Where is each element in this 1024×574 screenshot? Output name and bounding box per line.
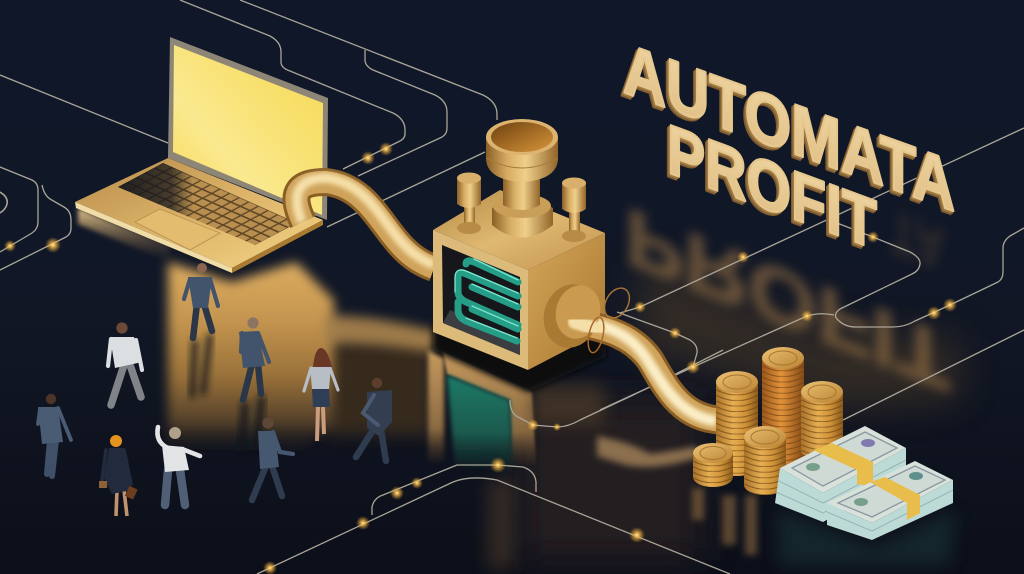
brown secondary glow: [325, 340, 433, 435]
person: white shirt: [108, 322, 142, 405]
pipe reflection band: [325, 316, 440, 352]
bundle top face: [827, 461, 953, 523]
pipe: laptop to machine: [296, 178, 434, 268]
machine funnel: [486, 119, 558, 238]
title line: PROFIT: PROFIT: [667, 110, 877, 265]
machine knob right: [562, 178, 586, 242]
cube reflection frame: [428, 350, 444, 462]
pipe coupling: [537, 278, 635, 354]
laptop base: [75, 158, 323, 268]
title line: PROFIT: PROFIT: [666, 112, 876, 267]
person: top centre: [184, 263, 218, 398]
person: right suit: [356, 378, 392, 461]
title line: AUTOMATA: AUTOMATA: [623, 27, 955, 227]
teal heat exchanger: [455, 259, 518, 341]
title: Automata Profit: [620, 27, 955, 268]
money reflection: [778, 510, 955, 565]
laptop edge glow: [78, 208, 170, 262]
coin stack: front centre: [744, 426, 786, 495]
bundle paper band: [870, 477, 920, 520]
title reflection haze: [640, 260, 960, 410]
machine knob left: [457, 172, 481, 234]
coin reflections: [692, 488, 757, 555]
person: orange haired woman: [99, 435, 138, 516]
coin stack: back right: [801, 381, 843, 460]
reflection under wires: [486, 480, 514, 570]
pipe reflection right: [597, 436, 697, 467]
floor reflections: [78, 208, 960, 570]
laptop screen display: [173, 45, 323, 215]
bundle sides: [827, 480, 953, 540]
machine shadow: [433, 325, 606, 392]
coin stack: tallest: [762, 347, 804, 467]
coin stack: small left: [693, 443, 733, 487]
machine cube: [433, 190, 605, 370]
title line: AUTOMATA: AUTOMATA: [622, 29, 953, 229]
laptop trackpad: [135, 209, 220, 250]
funnel cup: [486, 137, 558, 182]
coin stack: back left: [716, 371, 758, 476]
banknote print: [792, 432, 897, 486]
laptop screen bezel: [168, 37, 328, 220]
teal window reflection: [447, 375, 513, 472]
pipe: machine to coins: [575, 320, 720, 421]
funnel neck: [503, 172, 540, 210]
person: centre suit: [239, 317, 269, 452]
title line: PROFIT: PROFIT: [664, 113, 874, 268]
banknote print: [838, 466, 945, 517]
cube front frame: [433, 230, 528, 370]
laptop keyboard: [118, 163, 297, 245]
wire glow nodes: [4, 142, 957, 574]
bundle top face: [780, 426, 906, 493]
title line: AUTOMATA: AUTOMATA: [620, 30, 952, 230]
central warm haze: [520, 400, 700, 560]
cube window: [442, 245, 520, 355]
title reflection: TA: [890, 193, 945, 286]
bundle paper band: [813, 443, 873, 487]
bundle sides: [775, 448, 906, 522]
cash bundle: front: [827, 461, 953, 540]
cube top face: [433, 190, 605, 270]
cash bundle: back: [775, 426, 906, 522]
title reflection: PROFIT: [625, 189, 950, 408]
person: waving white shirt: [157, 427, 200, 505]
funnel base collar: [492, 199, 553, 238]
person: far left suit: [38, 394, 71, 476]
golden laptop glow on floor: [168, 262, 334, 450]
person: bottom centre suit: [252, 417, 293, 500]
icon: laptop: [75, 37, 328, 273]
person: woman in grey top: [304, 348, 338, 441]
cube right face: [528, 233, 605, 370]
